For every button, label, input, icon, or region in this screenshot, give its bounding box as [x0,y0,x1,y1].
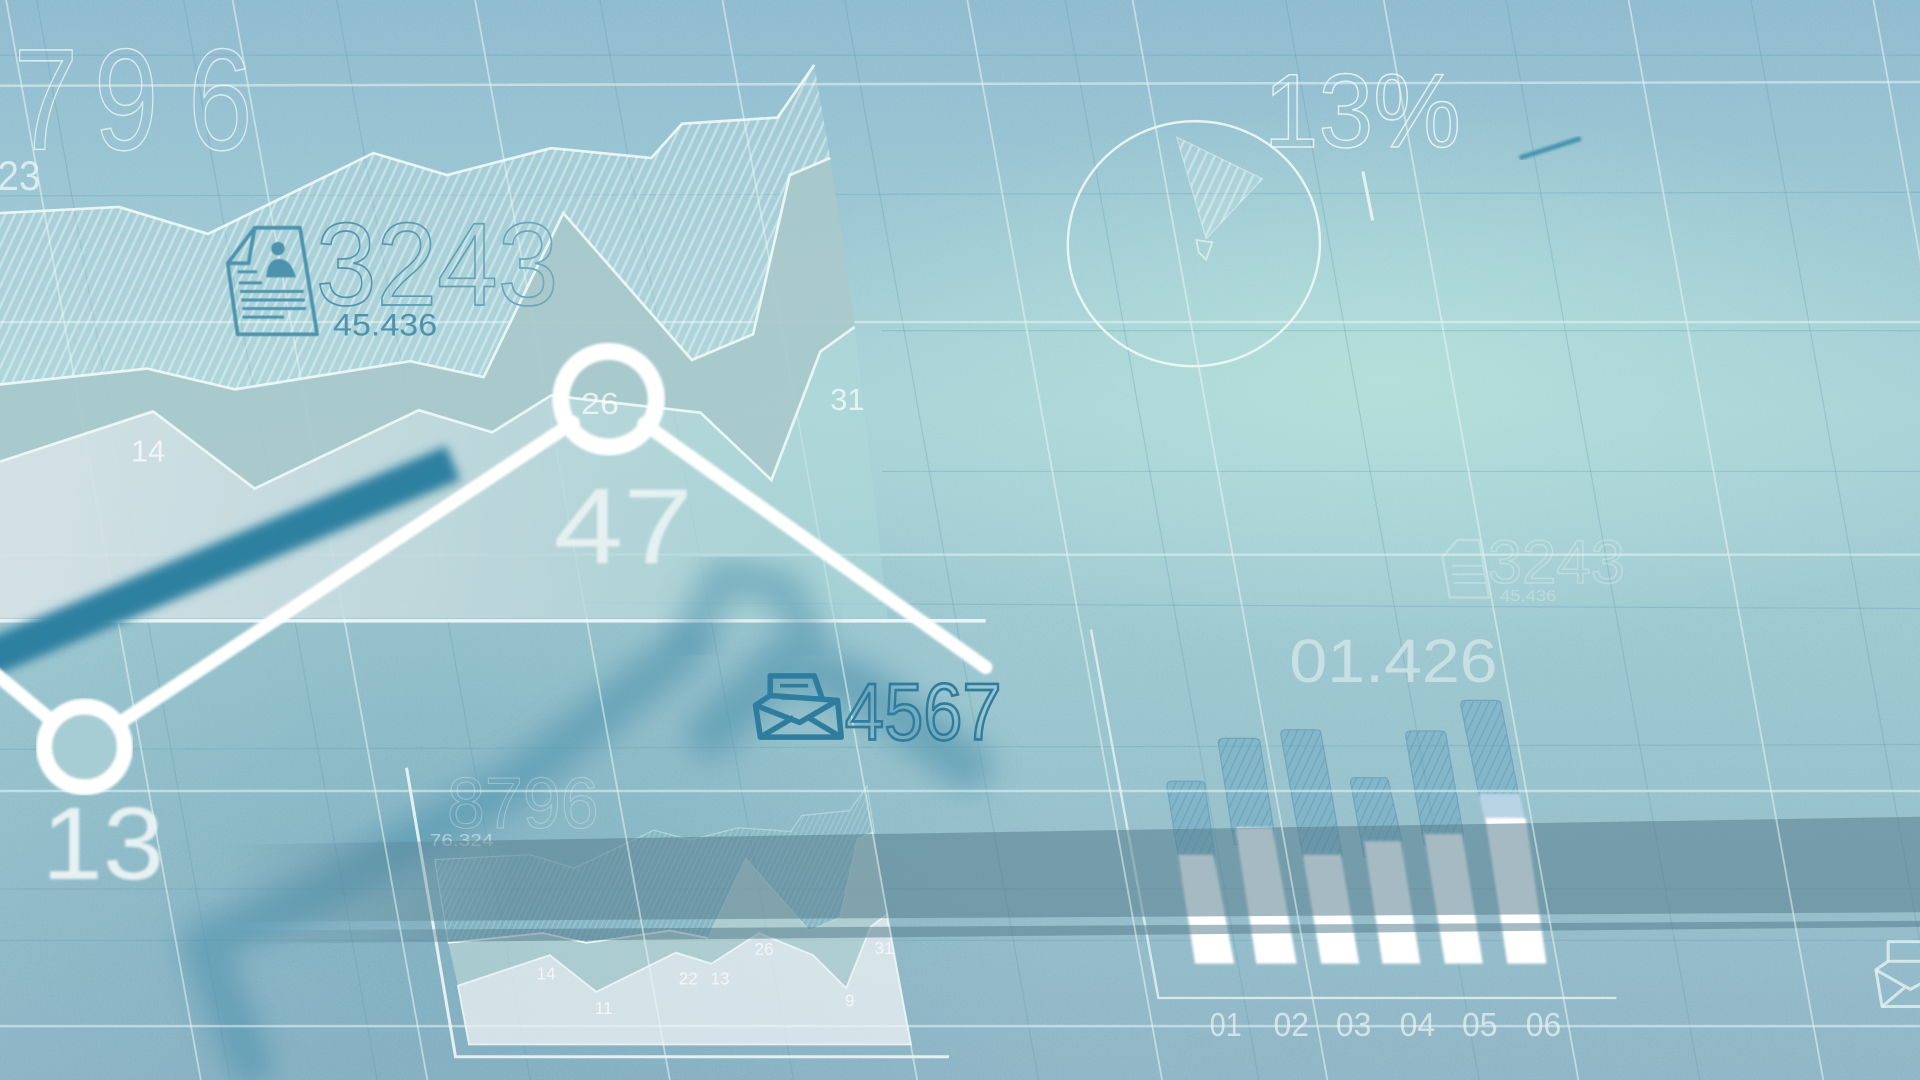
bar chart: hatched bars [1167,700,1518,877]
mid grey area [0,158,855,489]
tick mark [1363,171,1373,220]
hand shadow over chart [692,576,808,637]
faded 3243 group: 3243 [1488,528,1625,596]
bar chart: solid bars [1178,793,1547,964]
small chart: 11 [595,998,613,1018]
icon: document [228,228,317,334]
icon: open envelope [756,676,841,737]
figure 45.436: 45.436 [333,307,437,343]
bar chart value: 01.426 [1289,627,1498,695]
node: low [44,707,125,787]
pen tip mark [1520,138,1581,158]
bar chart labels: 03 [1336,1007,1371,1044]
bar chart labels: 04 [1400,1007,1435,1044]
small chart: 14 [537,964,556,984]
small chart [407,764,949,1057]
dark horizontal band [220,817,1920,944]
small chart: 8796 [447,764,599,844]
chart labels [131,383,864,469]
chart labels: 31 [830,383,864,417]
node: peak [561,351,656,447]
figure 13 percent: 13% [1264,53,1461,170]
bar chart labels: 02 [1273,1007,1309,1044]
small chart: 13 [710,968,730,988]
bar chart labels [1210,1007,1561,1044]
small chart: 76.324 [430,830,494,850]
pie chart [1052,105,1336,382]
chart labels: 26 [581,387,619,421]
main area chart [0,65,888,618]
main white line [0,351,986,787]
hatched area [0,65,830,389]
low light area [0,327,888,618]
bar chart labels: 06 [1526,1007,1561,1044]
faded 3243 group [1442,528,1625,605]
faded 3243 group: 45.436 [1500,588,1556,605]
area outlines [0,65,855,489]
hand shadow [202,649,967,1065]
figure 4567: 4567 [845,668,1002,758]
bar chart: axes [1091,629,1616,998]
small chart: 22 [679,968,698,988]
figure 3243: 3243 [316,199,558,330]
bar chart labels: 05 [1462,1007,1498,1044]
small chart: 26 [755,939,774,959]
small chart: 31 [875,938,894,958]
blurred pen [0,463,453,659]
icon: envelope right edge [1876,942,1920,1007]
figure 47: 47 [553,465,693,586]
figure 13: 13 [42,786,164,901]
chart labels: 14 [131,435,165,469]
small chart: 9 [845,991,855,1011]
bright horizontal rule [0,619,986,622]
bar chart labels: 01 [1210,1007,1242,1044]
